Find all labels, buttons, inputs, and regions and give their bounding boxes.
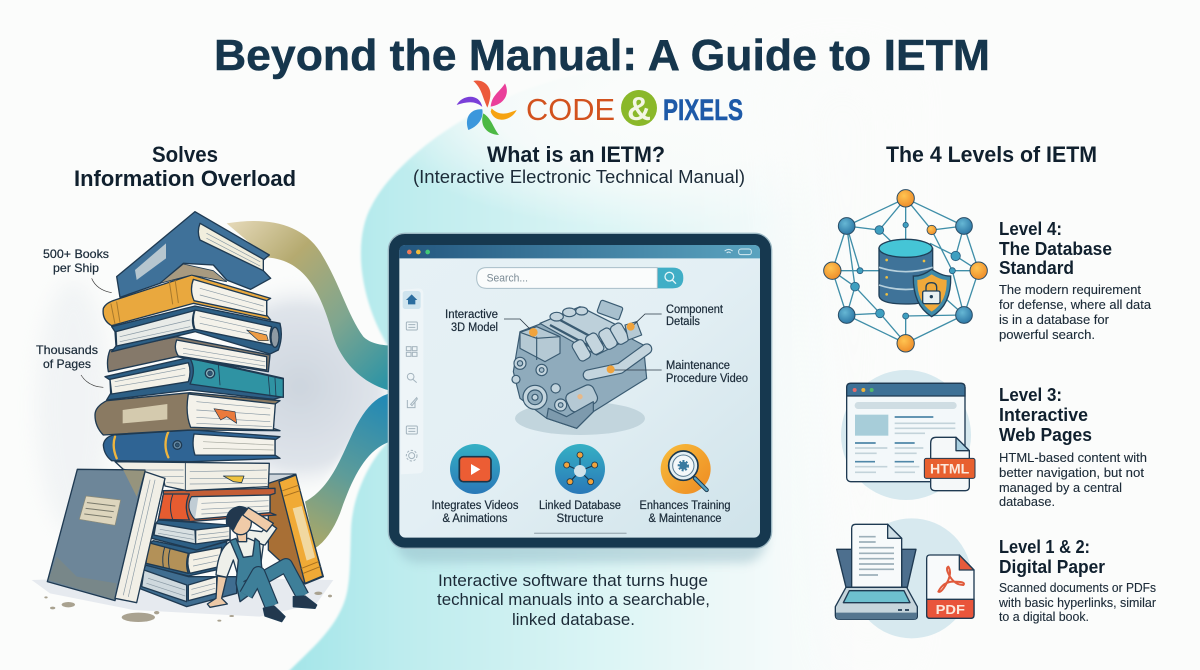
leaning grey manual [47,469,165,603]
callout lines [81,278,112,387]
feature icon: magnifier and gear [661,444,711,494]
heading: what is an IETM: (Interactive Electronic Technical Manual) [413,167,745,187]
text block: level 1 and 2 [998,537,1156,624]
text block: level 3: database. [999,494,1055,509]
feature icon: network [555,444,605,494]
technician overalls [230,538,265,602]
technician head and hand [237,533,247,542]
label: thousands of pages [36,343,98,371]
book 7 blue [103,430,280,462]
grey shadow behind stack [233,257,388,500]
panel: book stack illustration [32,212,390,622]
technician legs [247,565,303,596]
text block: level 4 [999,219,1152,342]
label: thousands of pages: of Pages [43,357,91,371]
icon: level 3 browser and html file [841,370,975,500]
label: linked database: Structure [556,513,604,525]
tablet frame [388,233,772,548]
text block: level 3: Web Pages [999,425,1092,445]
label: thousands of pages: Thousands [36,343,98,357]
security shield [913,269,951,317]
callout: component details: Details [666,316,700,328]
logo ampersand: & [627,90,651,127]
database cylinder [879,239,933,304]
caption below tablet: Interactive software that turns huge [438,571,708,590]
home indicator [534,533,627,534]
text block: level 4: powerful search. [999,327,1095,342]
book 10 white [152,520,230,550]
callout: maintenance procedure video: Maintenance [666,360,730,372]
overwhelmed technician [207,507,317,622]
text block: level 1 and 2: Scanned documents or PDFs [999,581,1156,595]
book 2 orange [103,275,271,326]
engine illustration [512,300,647,435]
label: linked database: Linked Database [539,500,621,512]
text block: level 4: Standard [999,258,1074,278]
caption below tablet: technical manuals into a searchable, [437,590,710,609]
text block: level 4: Level 4: [999,219,1062,239]
icon: level 4 database network [824,190,987,352]
icon: level 1-2 scanner and pdf: PDF [936,603,965,617]
callout: component details [666,304,724,328]
text block: level 1 and 2: with basic hyperlinks, similar [998,596,1156,610]
caption below tablet [437,571,710,629]
text block: level 4: is in a database for [999,312,1110,327]
search box: Search... [487,273,528,285]
logo word CODE: CODE [526,92,615,127]
title bar [399,245,760,258]
text block: level 3: Interactive [999,405,1088,425]
callout: maintenance procedure video: Procedure Video [666,373,748,385]
title: Beyond the Manual: A Guide to IETM [214,31,990,80]
callout: interactive 3D model [445,309,498,334]
floor shadow [32,577,333,617]
label: 500+ books per ship: per Ship [53,261,99,275]
lower stack and technician [139,474,323,622]
text block: level 3: Level 3: [999,385,1062,405]
rubble [44,592,332,622]
book 1 top blue [117,212,271,297]
label: enhances training: Enhances Training [640,500,730,512]
label: enhances training [640,500,730,525]
text block: level 4: for defense, where all data [999,297,1152,312]
label: 500+ books per ship: 500+ Books [43,247,109,261]
panel: tablet [388,233,772,548]
logo: Code & Pixels [457,81,743,135]
book 4 brown [107,337,270,372]
tablet screen [399,245,760,538]
book 11 tan [145,541,227,576]
caption below tablet: linked database. [512,610,635,629]
heading: the 4 levels: The 4 Levels of IETM [886,142,1097,167]
orange book leaning right [268,474,323,584]
callout: interactive 3D model: 3D Model [451,322,498,334]
feature icon: video [450,444,500,494]
label: enhances training: & Maintenance [648,513,722,525]
text block: level 4: The modern requirement [999,282,1141,297]
text block: level 4: The Database [999,239,1112,259]
text block: level 3: managed by a central [999,480,1122,495]
label: 500+ books per ship [43,247,109,275]
book 5 teal [105,357,283,400]
book 9 red orange [158,488,276,522]
label: linked database [539,500,621,525]
book 8 pages [115,462,269,491]
label: integrates videos: Integrates Videos [432,500,519,512]
background teal blob [288,0,950,670]
logo pinwheel mark [457,81,517,135]
technician raised arm and shirt [237,523,277,545]
label: integrates videos: & Animations [442,513,508,525]
book 3 white blue cover [112,306,281,354]
icon: level 3 browser and html file: HTML [930,461,970,477]
callout: interactive 3D model: Interactive [445,309,498,321]
icon: level 1-2 scanner and pdf [835,518,974,638]
label: integrates videos [432,500,519,525]
technician shoes [293,596,317,608]
heading: solves information overload: Solves [152,142,218,167]
heading: what is an IETM [413,142,745,187]
book 6 large brown [95,393,280,435]
logo ampersand [621,90,657,127]
heading: solves information overload: Information Overload [74,166,296,191]
technician supporting hand [207,576,227,607]
icon: home [406,294,417,304]
ribbon from books to tablet (lower) [305,393,390,548]
text block: level 1 and 2: to a digital book. [999,610,1089,624]
sidebar [401,288,423,474]
panel: levels icons [824,190,987,638]
text block: level 3: HTML-based content with [999,450,1147,465]
book 12 bottom [139,565,237,607]
tablet soft shadow [395,245,767,563]
text block: level 1 and 2: Level 1 & 2: [999,537,1090,557]
text block: level 3 [999,385,1147,509]
ribbon from books to tablet (upper) [227,221,390,391]
callout dots and leaders [504,314,662,399]
heading: what is an IETM: What is an IETM? [487,142,665,167]
callout: maintenance procedure video [666,360,748,385]
logo word PIXELS: PIXELS [663,94,743,127]
callout: component details: Component [666,304,724,316]
text block: level 3: better navigation, but not [999,465,1144,480]
heading: solves information overload [74,142,296,191]
search box [477,268,683,288]
text block: level 1 and 2: Digital Paper [999,557,1105,577]
